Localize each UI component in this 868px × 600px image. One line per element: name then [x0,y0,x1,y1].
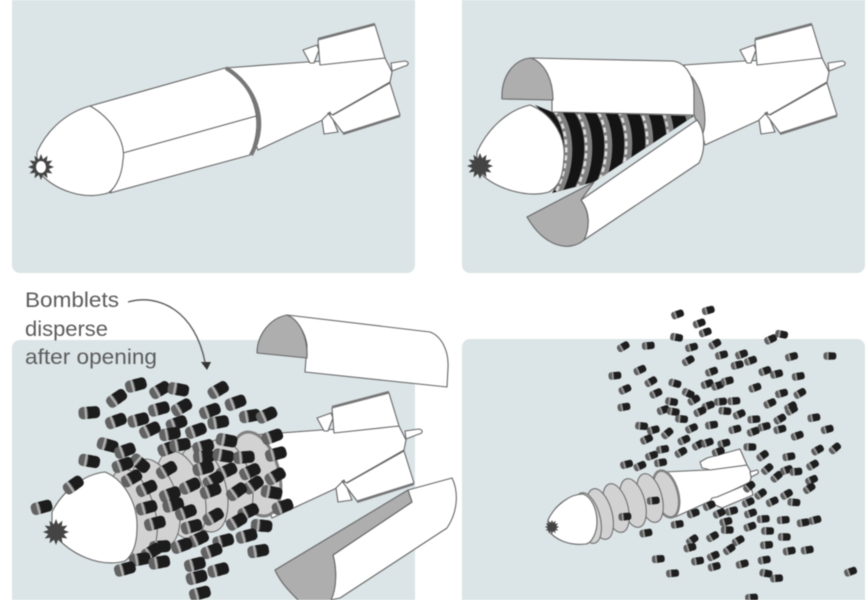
inner ring [690,75,705,135]
upper shell inner [502,58,553,100]
label text: disperse [25,318,108,341]
bomb tail fins [740,24,845,134]
upper shell half [531,58,694,115]
bomblet rows [552,112,692,192]
bomb tail cone [239,426,406,518]
label text: after opening [25,346,157,369]
lower shell inner [527,182,594,246]
illustration: bomblets dispersing [30,315,456,600]
tail rod [750,470,758,477]
panel: bomblets scatter background [462,339,865,600]
panel: sealed bomb background [12,0,415,273]
dark bomblet payload [534,104,694,194]
upper fin [700,449,747,470]
illustration: shell opening [467,24,845,246]
bomblets [608,305,858,600]
bomb casing [90,68,257,193]
lower fin [706,483,753,508]
annotation: bomblets disperse [25,289,211,370]
bomb tail cone [225,58,392,150]
panel: bomblets disperse background [12,340,415,600]
panel: shell opening background [462,0,865,273]
lower shell inner [275,490,412,600]
bomb nose [37,106,123,195]
bomb nose [52,472,137,563]
illustration: bomblets scattered [545,305,858,600]
fuse burst [545,520,559,534]
bomb nose [548,494,597,544]
lower shell half [330,478,456,600]
leader arrow [128,300,211,370]
fuse burst [43,519,69,545]
fuse burst [28,154,54,180]
bomblets [30,376,295,600]
label text: Bomblets [25,289,119,312]
label text [25,289,157,369]
fuse burst [467,153,493,179]
lower shell half [581,120,704,240]
upper shell inner [257,315,307,358]
casing ring [226,68,259,155]
core disks [100,427,289,562]
illustration: sealed bomb [28,24,408,195]
bomb tail fins [317,392,422,502]
upper shell half [287,315,448,387]
casing seam [123,115,260,153]
core disks [570,468,684,546]
bomb tail fins [303,24,408,134]
bomb nose [477,105,564,194]
bomb tail cone [663,465,752,517]
bomb tail cone [684,58,829,145]
